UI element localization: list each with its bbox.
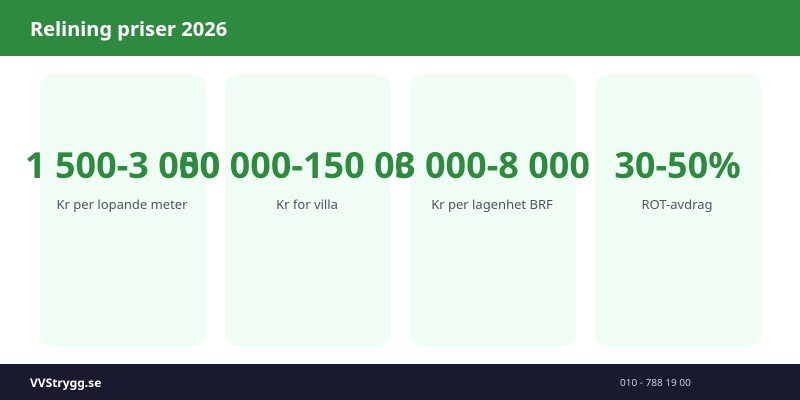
label: ROT deduction: ROT-avdrag: [641, 195, 713, 213]
label: price for house: Kr for villa: [276, 195, 338, 213]
value: ROT deduction: 30-50%: [614, 140, 741, 189]
panel: price per metre: [40, 75, 206, 346]
value: price per metre: 1 500-3 000: [25, 140, 220, 189]
header bar: [0, 0, 800, 56]
label: price per metre: Kr per lopande meter: [56, 195, 188, 213]
label: price per apartment: Kr per lagenhet BRF: [431, 195, 553, 213]
footer phone: 010 - 788 19 00: [620, 375, 691, 389]
title: Relining priser 2026: [30, 15, 227, 42]
value: price per apartment: 3 000-8 000: [395, 140, 590, 189]
panel: ROT deduction: [595, 75, 761, 346]
footer brand: VVStrygg.se: [30, 374, 101, 391]
value: price for house: 50 000-150 000: [179, 140, 436, 189]
footer bar: [0, 364, 800, 400]
panel: price per apartment: [410, 75, 576, 346]
panel: price for house: [225, 75, 391, 346]
